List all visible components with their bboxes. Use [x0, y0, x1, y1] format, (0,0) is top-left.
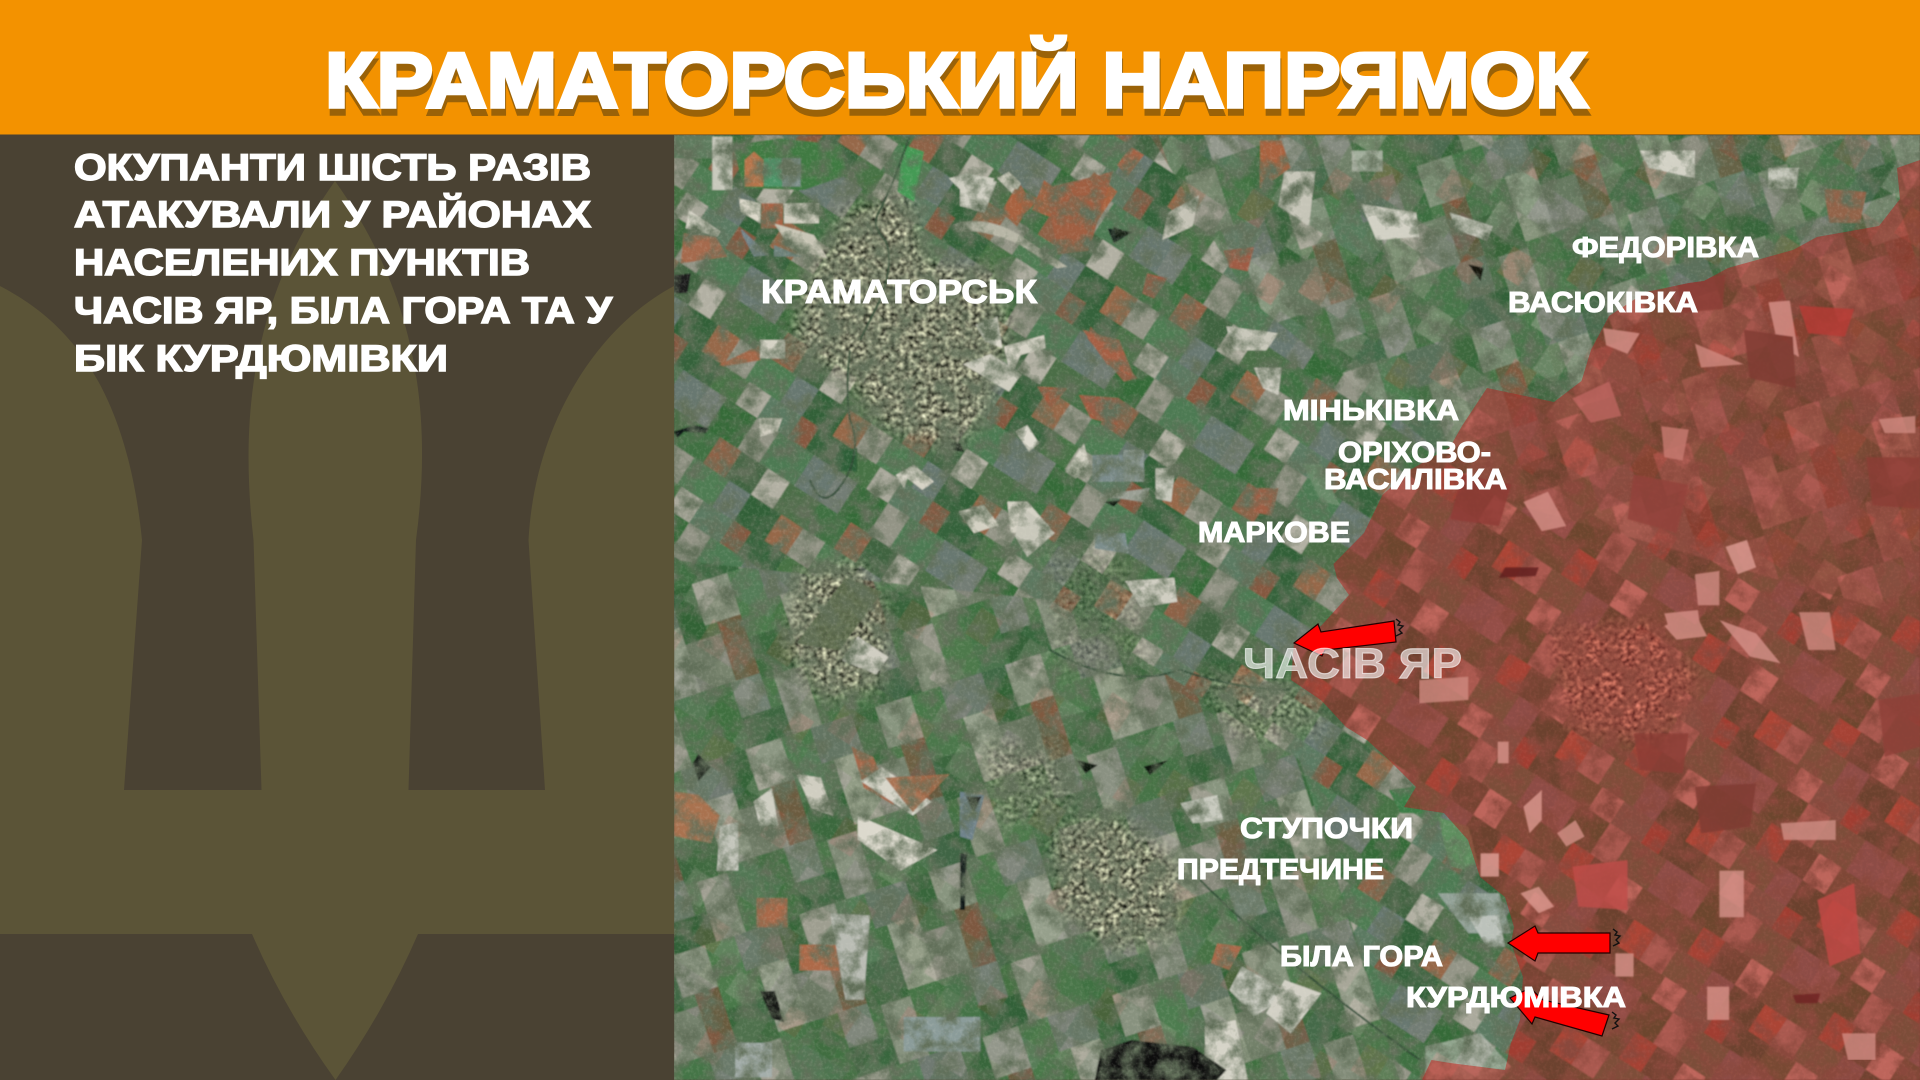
satellite map [674, 135, 1920, 1080]
rivers [810, 135, 1420, 1060]
summary text block: ЧАСІВ ЯР, БІЛА ГОРА ТА У [74, 290, 613, 331]
label: Minkivka: МІНЬКІВКА [1283, 395, 1459, 427]
trident emblem watermark [0, 181, 674, 1080]
grain texture [674, 135, 1920, 1080]
fields south-centre [960, 760, 1511, 1080]
fields visible inside the overlay [1419, 275, 1920, 1060]
fields north-centre [960, 140, 1866, 607]
title: КРАМАТОРСЬКИЙ НАПРЯМОК [326, 43, 1588, 131]
fields south-west [674, 578, 980, 1077]
summary text block: БІК КУРДЮМІВКИ [74, 338, 448, 379]
fine speckle texture [674, 135, 1920, 1080]
label: Orikhovo-Vasylivka: ВАСИЛІВКА [1324, 464, 1507, 496]
arrow: Bila Hora [1508, 926, 1620, 961]
label: Kurdiumivka: КУРДЮМІВКА [1406, 982, 1626, 1014]
Russian-occupied territory overlay [1280, 135, 1920, 1080]
header band [0, 0, 1920, 134]
arrow: Chasiv Yar [1294, 619, 1403, 656]
label: Stupochky: СТУПОЧКИ [1240, 813, 1413, 845]
label: Predtechyne: ПРЕДТЕЧИНЕ [1177, 854, 1384, 886]
label: Bila Hora: БІЛА ГОРА [1280, 941, 1443, 973]
label: Markove: МАРКОВЕ [1198, 517, 1350, 549]
label: Orikhovo-Vasylivka [1324, 437, 1507, 496]
label: Fedorivka: ФЕДОРІВКА [1572, 232, 1759, 264]
arrow: Kurdiumivka [1510, 988, 1619, 1036]
label: Vasiukivka: ВАСЮКІВКА [1508, 287, 1698, 319]
map base farmland [674, 135, 1920, 1080]
label: Orikhovo-Vasylivka: ОРІХОВО- [1338, 437, 1491, 469]
label: Kramatorsk: КРАМАТОРСЬК [761, 273, 1038, 310]
left panel background [0, 134, 674, 1080]
summary text block: ОКУПАНТИ ШІСТЬ РАЗІВ [74, 147, 591, 188]
urban areas [785, 190, 1700, 950]
title: КРАМАТОРСЬКИЙ НАПРЯМОК [325, 36, 1587, 124]
detailed fields around Kramatorsk [674, 135, 1169, 533]
summary text block [74, 147, 613, 379]
summary text block: АТАКУВАЛИ У РАЙОНАХ [74, 193, 591, 235]
summary text block: НАСЕЛЕНИХ ПУНКТІВ [74, 242, 530, 283]
map labels [761, 232, 1759, 1014]
label: Chasiv Yar: ЧАСІВ ЯР [1243, 640, 1462, 688]
